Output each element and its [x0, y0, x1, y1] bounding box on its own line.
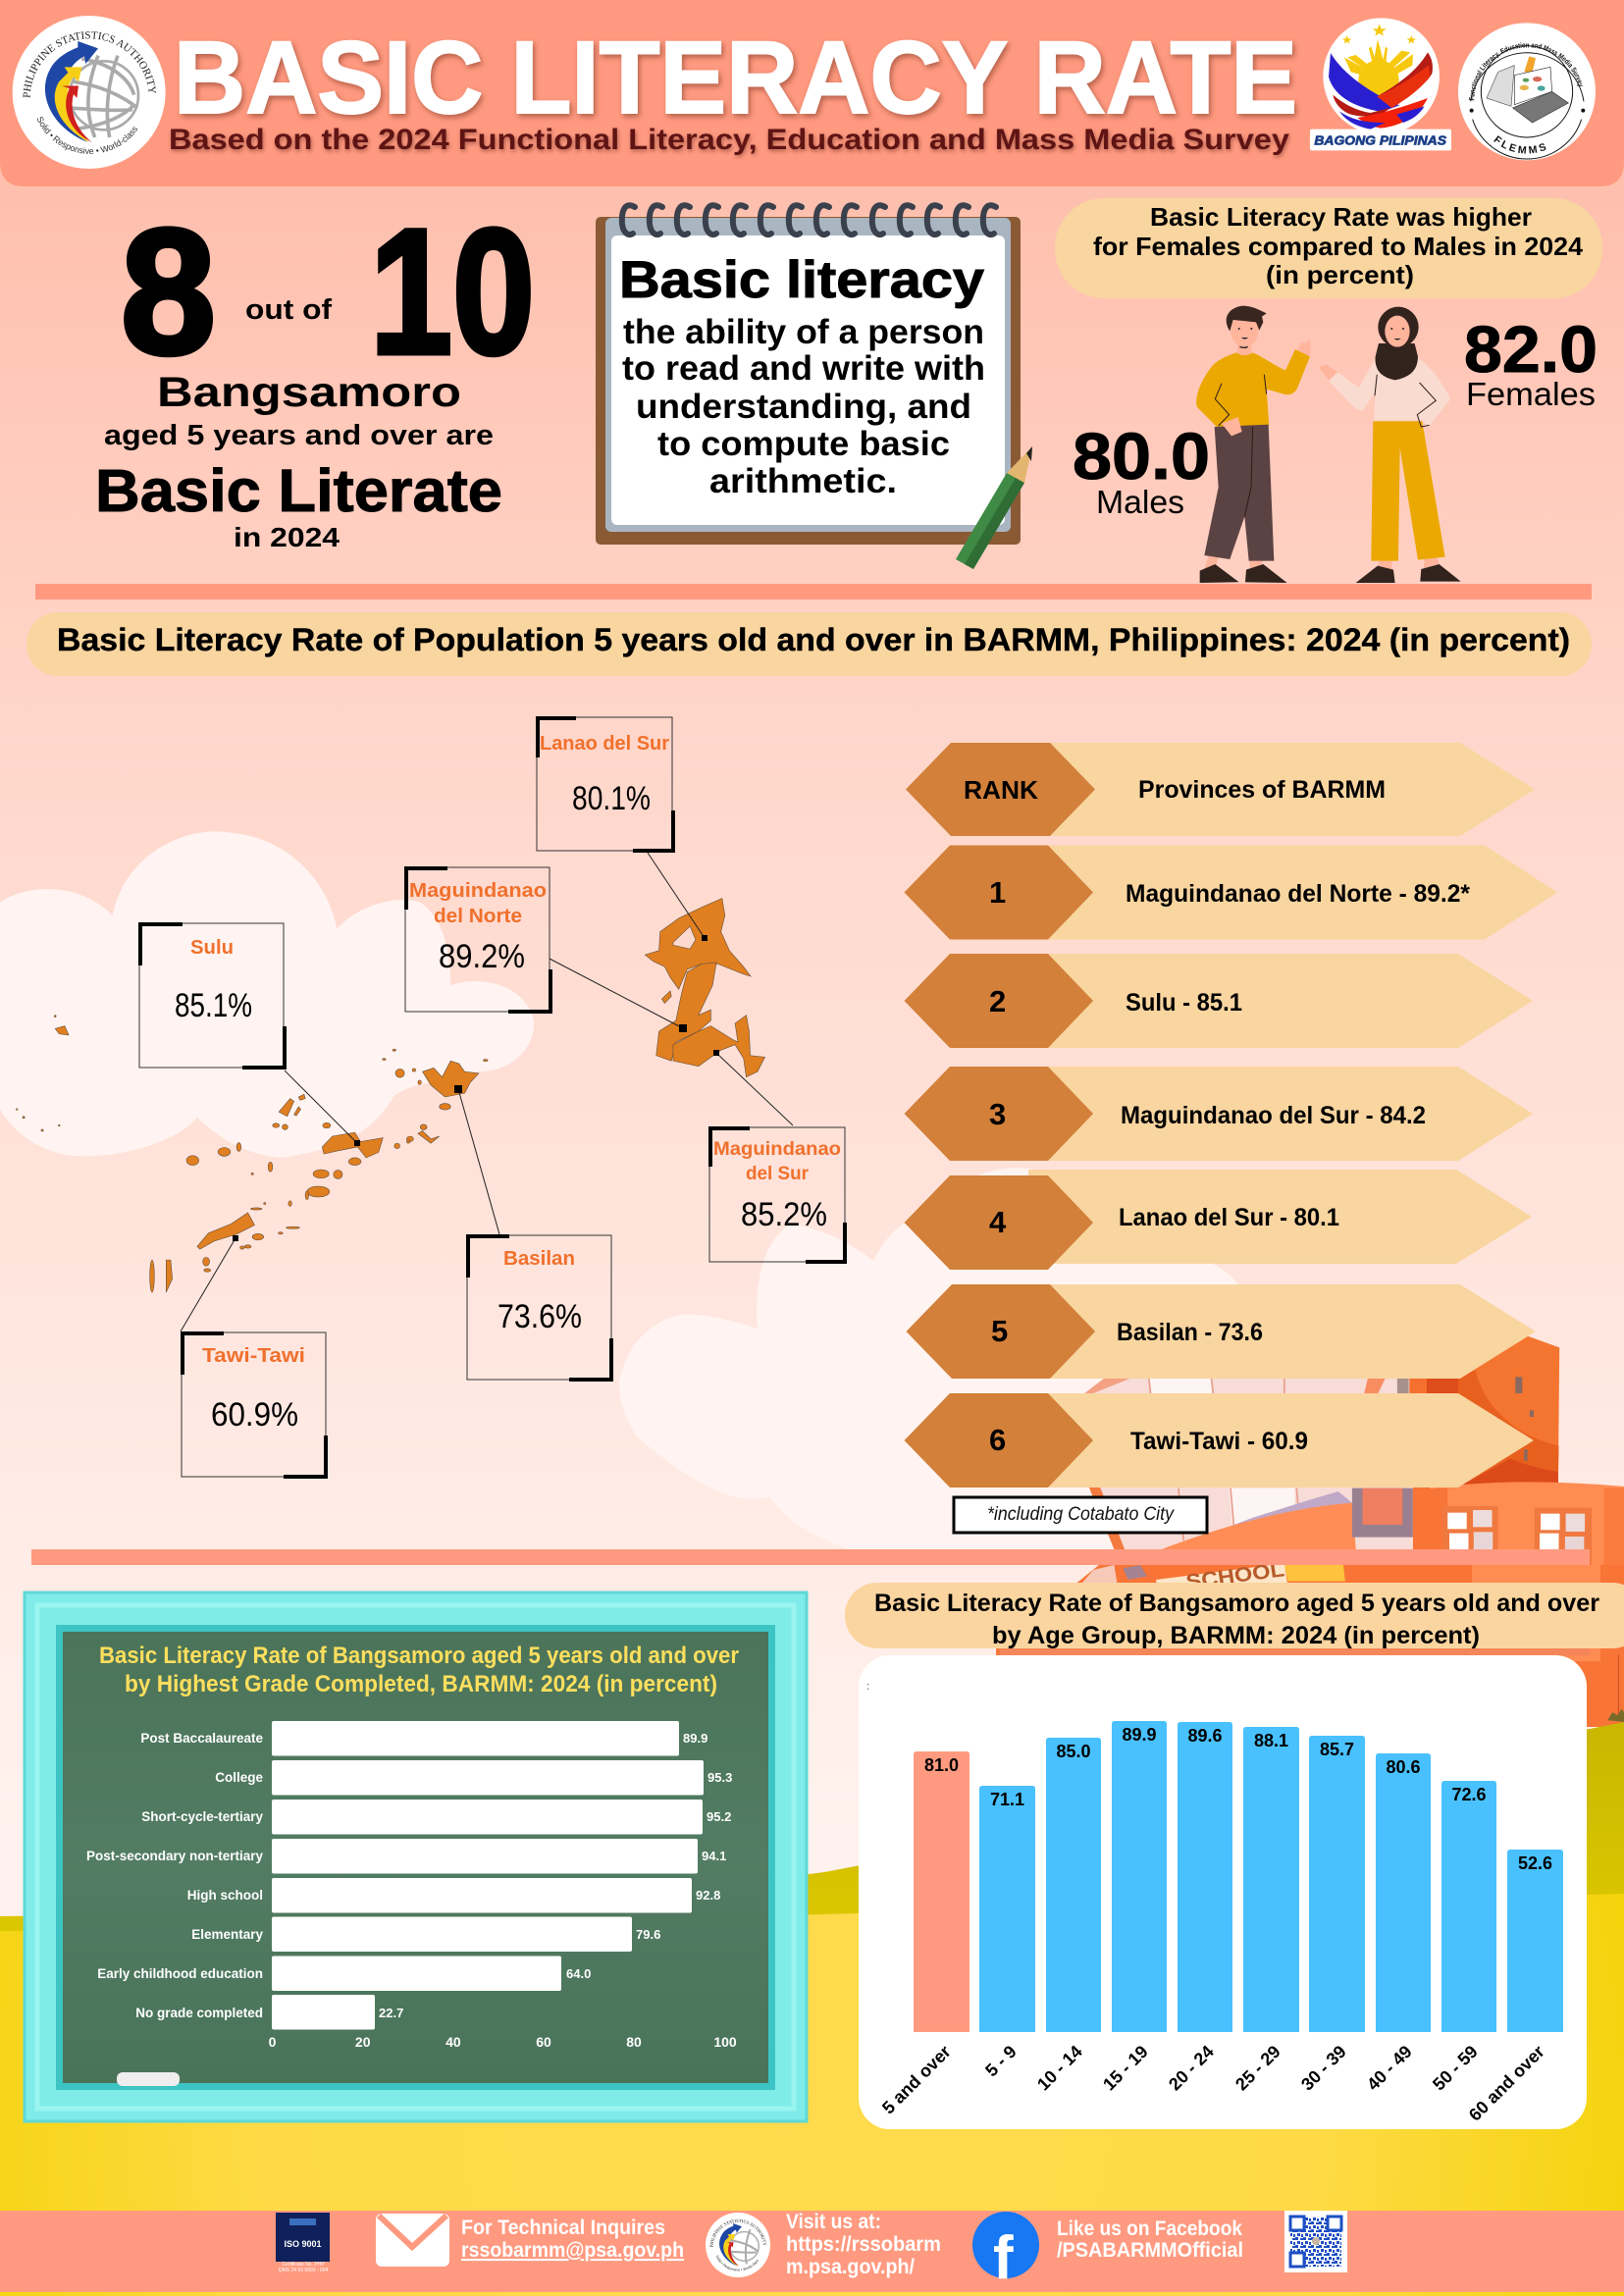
column values: 52.6 — [1518, 1853, 1552, 1873]
logo: FLEMMS — [1458, 23, 1596, 161]
category labels: 25 - 29 — [1231, 2042, 1284, 2094]
callout: Maguindanao del Sur: Maguindanao — [713, 1139, 841, 1160]
horizontal bar chart — [86, 1721, 737, 2050]
category labels — [878, 2042, 1548, 2125]
callout: Lanao del Sur: Lanao del Sur — [540, 733, 669, 755]
board title: Basic Literacy Rate of Bangsamoro aged 5 years old and over — [99, 1643, 739, 1669]
column values: 88.1 — [1254, 1731, 1288, 1750]
technical inquiries text: For Technical Inquires — [461, 2217, 665, 2239]
horizontal bar chart: 79.6 — [636, 1927, 660, 1942]
board title: by Highest Grade Completed, BARMM: 2024 (in percent) — [125, 1671, 717, 1697]
QR code — [1284, 2211, 1347, 2272]
callout: Tawi-Tawi — [182, 1332, 326, 1477]
rank 1: 1 — [989, 875, 1006, 910]
stat: Males 80.0: 80.0 — [1073, 420, 1210, 494]
definition text: to read and write with — [622, 349, 985, 388]
ground: front hill — [0, 1894, 1624, 2296]
rank 3 — [905, 1067, 1533, 1161]
definition text: understanding, and — [636, 388, 971, 426]
Bangsamoro: Bangsamoro — [157, 369, 461, 416]
column values: 89.6 — [1187, 1726, 1223, 1746]
horizontal bar chart: Early childhood education — [97, 1966, 263, 1981]
Facebook text: /PSABARMMOfficial — [1057, 2239, 1243, 2262]
callout: Basilan — [467, 1235, 611, 1380]
logo: Philippine Statistics Authority: PHILIPPINE STATISTICS AUTHORITY — [23, 31, 157, 98]
callout: Maguindanao del Sur — [709, 1127, 845, 1262]
definition text: arithmetic. — [709, 462, 897, 500]
callout: females vs males heading: (in percent) — [1266, 260, 1414, 289]
illustration: woman — [1319, 307, 1461, 583]
stat: 8 out of 10 Bangsamoro — [95, 191, 535, 552]
school building illustration — [996, 1336, 1624, 1727]
footer band — [0, 2211, 1624, 2292]
map of BARMM — [16, 853, 793, 1331]
stat: Males 80.0: Males — [1096, 484, 1184, 520]
section heading: provinces — [26, 612, 1592, 676]
rank table — [905, 743, 1557, 1487]
horizontal bar chart: 64.0 — [566, 1966, 591, 1981]
callout: Basilan: 73.6% — [498, 1298, 582, 1335]
callout: Maguindanao del Norte: 89.2% — [439, 938, 525, 975]
Facebook text — [1057, 2218, 1243, 2262]
school tower — [1458, 1336, 1559, 1485]
logo: Bagong Pilipinas — [1310, 18, 1451, 150]
horizontal bar chart: 89.9 — [683, 1731, 707, 1746]
heading: age group chart: by Age Group, BARMM: 2024 (in percent) — [992, 1622, 1480, 1649]
school building illustration: SCHOOL — [1184, 1558, 1285, 1593]
rank header row: RANK — [964, 775, 1038, 805]
stat: Females 82.0: 82.0 — [1464, 313, 1598, 387]
column chart panel: age groups — [859, 1655, 1587, 2129]
subtitle: Based on the 2024 Functional Literacy, Education and Mass Media Survey — [169, 124, 1289, 156]
divider bottom — [31, 1549, 1590, 1565]
ISO badge: ISO 9001 — [284, 2239, 322, 2249]
logo: Philippine Statistics Authority — [12, 16, 166, 169]
ISO badge: Certificate No. PHP — [282, 2262, 325, 2268]
category labels: 10 - 14 — [1033, 2042, 1086, 2094]
ISO badge: QMS 24 93 0003 - 004 — [279, 2268, 329, 2273]
spiral rings — [622, 205, 996, 235]
horizontal bar chart: College — [215, 1770, 263, 1785]
logo: FLEMMS: Functional Literacy, Education and Mass Media Survey — [1469, 42, 1583, 100]
school lower wing — [996, 1565, 1624, 1727]
category labels: 20 - 24 — [1165, 2042, 1218, 2094]
callout: Maguindanao del Norte — [405, 867, 550, 1012]
definition heading: Basic literacy — [619, 251, 985, 309]
rank 4: Lanao del Sur - 80.1 — [1119, 1204, 1339, 1231]
horizontal bar chart: 40 — [445, 2034, 461, 2050]
blackboard chart panel — [24, 1592, 808, 2122]
horizontal bar chart: 80 — [626, 2034, 642, 2050]
logo: Philippine Statistics Authority: Solid • Responsive • World-class — [37, 117, 137, 154]
in 2024: in 2024 — [234, 522, 340, 552]
rank 6: 6 — [989, 1423, 1006, 1457]
rank 2 — [905, 954, 1533, 1048]
stat: Males 80.0 — [1073, 420, 1210, 520]
column values: 89.9 — [1122, 1725, 1157, 1745]
Facebook text: Like us on Facebook — [1057, 2218, 1242, 2240]
illustration: man — [1196, 306, 1311, 583]
website text: m.psa.gov.ph/ — [786, 2256, 915, 2278]
callout: Sulu — [139, 923, 285, 1068]
school glass front — [1084, 1379, 1413, 1567]
definition text: to compute basic — [657, 425, 950, 463]
callout: Sulu: Sulu — [190, 937, 234, 959]
title: BASIC LITERACY RATE — [174, 21, 1297, 135]
callout: Maguindanao del Norte: Maguindanao — [409, 880, 547, 902]
rank 2: 2 — [989, 984, 1006, 1018]
board title — [99, 1643, 739, 1697]
website text — [786, 2211, 941, 2278]
heading: age group chart: Basic Literacy Rate of Bangsamoro aged 5 years old and over — [874, 1590, 1599, 1617]
aged line: aged 5 years and over are — [104, 420, 494, 451]
horizontal bar chart: Post-secondary non-tertiary — [86, 1849, 263, 1863]
column values: 71.1 — [990, 1790, 1024, 1809]
icon: email envelope — [376, 2214, 449, 2267]
ground: back hill — [0, 1722, 1624, 2296]
horizontal bar chart: 20 — [355, 2034, 371, 2050]
horizontal bar chart: 92.8 — [696, 1888, 720, 1903]
logo: PSA small — [706, 2213, 770, 2277]
section heading: provinces: Basic Literacy Rate of Population 5 years old and over in BARMM, Philippines: 2024 (in percent) — [57, 622, 1570, 657]
category labels: 40 - 49 — [1363, 2042, 1416, 2094]
callout: females vs males heading — [1055, 198, 1602, 298]
school right wing — [1431, 1482, 1624, 1577]
rank 4: 4 — [989, 1205, 1007, 1239]
chalk — [117, 2072, 180, 2086]
column values: 72.6 — [1451, 1785, 1487, 1804]
heading: age group chart — [845, 1583, 1624, 1649]
category labels: 5 and over — [878, 2042, 955, 2118]
background cloud: left — [0, 831, 534, 1158]
notebook definition panel — [596, 205, 1032, 569]
Basic Literate: Basic Literate — [95, 457, 502, 524]
column values: 81.0 — [924, 1755, 959, 1775]
icon: Facebook: f — [993, 2224, 1014, 2292]
header band — [0, 0, 1624, 186]
horizontal bar chart: No grade completed — [135, 2006, 263, 2020]
category labels: 5 - 9 — [981, 2042, 1021, 2080]
horizontal bar chart: 0 — [269, 2034, 277, 2050]
footnote box — [954, 1497, 1207, 1533]
horizontal bar chart: 95.2 — [707, 1809, 731, 1824]
rank 5: Basilan - 73.6 — [1117, 1319, 1263, 1346]
callout: Basilan: Basilan — [503, 1248, 575, 1270]
big number 10: 10 — [370, 191, 535, 391]
horizontal bar chart: 100 — [713, 2034, 737, 2050]
ISO badge — [276, 2213, 330, 2273]
column values: 85.0 — [1056, 1742, 1091, 1761]
callout: Maguindanao del Sur: del Sur — [746, 1164, 810, 1184]
out of: out of — [245, 294, 332, 326]
horizontal bar chart: Post Baccalaureate — [140, 1731, 263, 1746]
callout: Tawi-Tawi: 60.9% — [211, 1396, 298, 1434]
horizontal bar chart: High school — [187, 1888, 263, 1903]
category labels: 30 - 39 — [1297, 2042, 1350, 2094]
logo: FLEMMS: F L E M M S — [1493, 135, 1546, 154]
horizontal bar chart: 95.3 — [707, 1770, 732, 1785]
rank 4 — [905, 1170, 1532, 1270]
horizontal bar chart: 60 — [536, 2034, 551, 2050]
technical inquiries text — [461, 2217, 684, 2262]
horizontal bar chart: Short-cycle-tertiary — [141, 1809, 263, 1824]
category labels: 15 - 19 — [1099, 2042, 1152, 2094]
callout: females vs males heading: Basic Literacy Rate was higher — [1150, 202, 1532, 232]
callout: Maguindanao del Norte: del Norte — [434, 906, 522, 927]
rank 3: 3 — [989, 1097, 1006, 1131]
rank header row — [906, 743, 1535, 836]
stat: Females 82.0: Females — [1466, 376, 1596, 412]
category labels: 50 - 59 — [1429, 2042, 1482, 2094]
rank 3: Maguindanao del Sur - 84.2 — [1121, 1102, 1426, 1129]
rank 1: Maguindanao del Norte - 89.2* — [1126, 880, 1470, 908]
column values: 80.6 — [1386, 1757, 1421, 1777]
category labels: 60 and over — [1465, 2042, 1548, 2125]
column values — [924, 1725, 1552, 1873]
leader lines — [181, 853, 793, 1331]
horizontal bar chart: 22.7 — [379, 2006, 403, 2020]
rank 5: 5 — [991, 1314, 1008, 1348]
website text: https://rssobarm — [786, 2233, 941, 2256]
footnote box: *including Cotabato City — [987, 1504, 1175, 1525]
callout: Lanao del Sur — [537, 717, 673, 851]
column values: 85.7 — [1320, 1740, 1354, 1759]
rank 5 — [907, 1284, 1536, 1379]
divider top — [35, 584, 1592, 600]
callout: Maguindanao del Sur: 85.2% — [741, 1196, 827, 1233]
rank 1 — [905, 846, 1557, 940]
big number 8: 8 — [121, 191, 216, 391]
logo: PSA small: PHILIPPINE STATISTICS AUTHORITY — [710, 2219, 766, 2247]
technical inquiries text: rssobarmm@psa.gov.ph — [461, 2239, 684, 2262]
horizontal bar chart: 94.1 — [702, 1849, 726, 1863]
logo: PSA small: Solid • Responsive • World-class — [716, 2255, 759, 2271]
logo: Bagong Pilipinas: BAGONG PILIPINAS — [1314, 134, 1447, 148]
rank 6 — [905, 1393, 1534, 1487]
callout: Tawi-Tawi: Tawi-Tawi — [202, 1345, 305, 1367]
rank header row: Provinces of BARMM — [1138, 776, 1386, 804]
website text: Visit us at: — [786, 2211, 881, 2233]
columns — [914, 1721, 1563, 2032]
rank 2: Sulu - 85.1 — [1126, 989, 1242, 1017]
column chart panel: age groups: : — [866, 1681, 869, 1693]
icon: Facebook — [972, 2212, 1039, 2292]
icon: pencil — [956, 446, 1032, 569]
rank 6: Tawi-Tawi - 60.9 — [1130, 1428, 1308, 1455]
background cloud: right — [619, 1168, 1276, 1560]
definition text — [622, 313, 985, 500]
map islands — [16, 899, 764, 1292]
callout: Sulu: 85.1% — [175, 987, 252, 1024]
definition text: the ability of a person — [623, 313, 984, 351]
callout: females vs males heading: for Females compared to Males in 2024 — [1093, 232, 1584, 261]
callout: Lanao del Sur: 80.1% — [572, 780, 651, 817]
horizontal bar chart: Elementary — [191, 1927, 263, 1942]
